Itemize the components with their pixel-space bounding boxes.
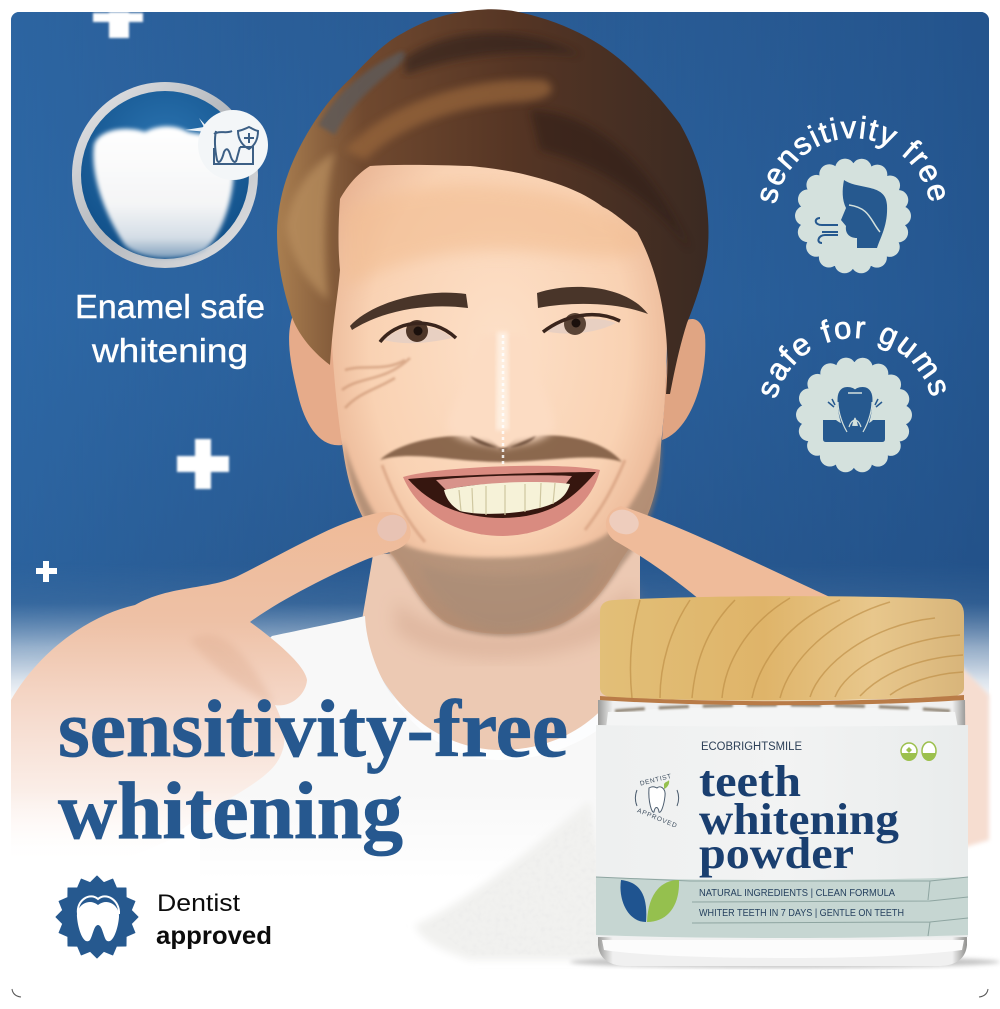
powder top band — [606, 707, 958, 728]
plus sign top — [93, 12, 143, 38]
text: dentist approved: approved — [156, 922, 272, 950]
product name: powder — [699, 829, 854, 878]
hand crease shading — [190, 635, 275, 705]
wood lid — [600, 596, 964, 705]
text: enamel safe whitening: Enamel safe — [75, 288, 265, 325]
eco icons — [901, 742, 936, 761]
left ear — [289, 313, 342, 445]
product jar — [570, 596, 1000, 968]
eye wrinkles — [342, 358, 410, 408]
plus sign middle — [177, 439, 229, 489]
bottom white fade — [11, 790, 601, 880]
forehead tone — [345, 185, 650, 290]
right ear — [662, 319, 705, 440]
nose — [447, 335, 555, 448]
eyebrow right — [537, 287, 648, 314]
icon: tooth with shield — [214, 127, 258, 164]
green band — [596, 877, 968, 938]
text: enamel safe whitening: whitening — [91, 332, 248, 369]
nostril shadow — [470, 436, 536, 451]
paper label — [596, 725, 968, 938]
smile lines — [382, 460, 625, 542]
right fingernail — [606, 506, 642, 538]
eye right — [543, 313, 620, 335]
icon: head with breath — [816, 180, 887, 248]
headline: sensitivity-free whitening — [58, 683, 568, 856]
right hand finger — [606, 506, 832, 600]
dark top — [405, 33, 580, 75]
eyebrow left — [350, 293, 468, 330]
light sideburn — [286, 152, 335, 300]
dentist approved stamp: DENTIST — [639, 773, 672, 788]
curved label: sensitivity free — [760, 116, 945, 204]
text: dentist approved: Dentist — [157, 890, 240, 917]
shirt — [200, 616, 700, 880]
brand name: ECOBRIGHTSMILE — [701, 741, 802, 753]
glass body — [598, 700, 967, 966]
badge: sensitivity free — [760, 116, 945, 274]
icon: tooth in gum — [823, 387, 885, 442]
hair — [277, 9, 708, 394]
plus sign small — [36, 561, 57, 582]
headline: sensitivity-free whitening: sensitivity-free — [58, 683, 568, 774]
leaves — [620, 880, 679, 922]
eye left — [380, 320, 456, 343]
brown highlights — [345, 79, 552, 160]
text: dentist approved — [156, 890, 272, 950]
band lines — [596, 877, 968, 936]
teeth — [444, 482, 570, 514]
badge: dentist approved icon — [56, 876, 138, 958]
badge: safe for gums — [762, 319, 946, 472]
headline: sensitivity-free whitening: whitening — [58, 765, 403, 856]
powder pile — [415, 800, 620, 960]
product name: teeth — [699, 757, 801, 806]
face — [330, 136, 667, 634]
text: enamel safe whitening — [75, 288, 265, 369]
product name — [699, 757, 899, 878]
small badge circle — [198, 110, 268, 180]
mustache — [380, 435, 622, 462]
sparkle — [185, 118, 220, 132]
curved label: safe for gums — [762, 319, 946, 398]
icon: enamel tooth medallion — [72, 82, 268, 268]
jar shadow — [570, 956, 1000, 968]
center dotted line — [502, 335, 504, 525]
neck — [362, 530, 640, 750]
mouth — [403, 466, 600, 536]
grey patch — [318, 52, 405, 135]
tooth glyph — [77, 902, 119, 941]
stubble beard — [343, 435, 662, 636]
left hand — [11, 512, 411, 870]
product name: whitening — [699, 795, 899, 844]
dentist approved stamp: APPROVED — [636, 807, 678, 830]
band text: NATURAL INGREDIENTS | CLEAN FORMULA — [699, 888, 895, 899]
left fingernail — [374, 511, 410, 545]
dentist approved stamp — [635, 773, 679, 830]
tooth — [93, 126, 234, 258]
product jar: WHITER TEETH IN 7 DAYS | GENTLE ON TEETH — [699, 908, 904, 919]
chin stubble — [420, 560, 600, 632]
right arm behind jar — [955, 660, 989, 850]
